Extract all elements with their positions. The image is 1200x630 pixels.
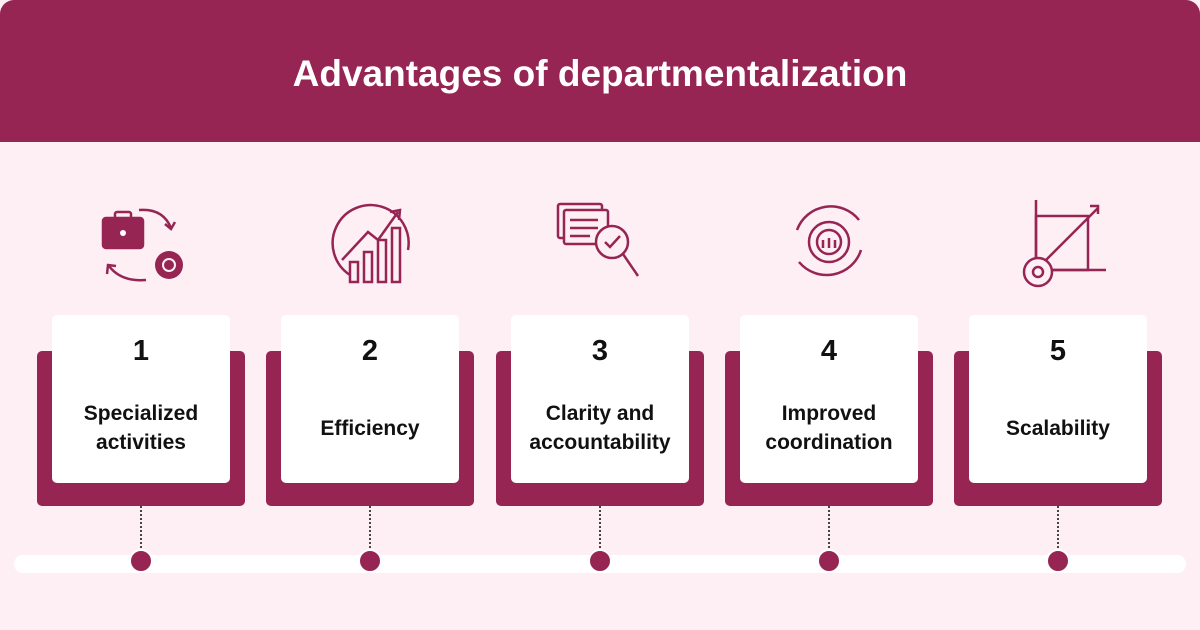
card 1: activities: [96, 431, 186, 454]
icon: gear with rising bars: [331, 204, 410, 284]
dot 3: [588, 549, 612, 573]
title: [0, 0, 1200, 142]
icon: briefcase and gear cycle: [102, 208, 183, 282]
card 5: [969, 315, 1147, 483]
item 1: [37, 208, 245, 571]
icon: gear with cycle arrows: [796, 205, 862, 276]
card 3: [511, 315, 689, 483]
card 4: [740, 315, 918, 483]
title: Advantages of departmentalization: [293, 53, 907, 94]
card 1: [52, 315, 230, 483]
dot 2: [358, 549, 382, 573]
dot 4: [817, 549, 841, 573]
card 4: coordination: [765, 431, 893, 454]
timeline bar: [14, 555, 1186, 573]
card 3: Clarity and: [546, 402, 654, 425]
item 3: [496, 202, 704, 571]
card 4: Improved: [782, 402, 876, 425]
dot 5: [1046, 549, 1070, 573]
card 2: 2: [362, 335, 378, 367]
card 5: Scalability: [1006, 416, 1110, 440]
card 2: Efficiency: [320, 416, 420, 440]
card 2: [281, 315, 459, 483]
icon: scaling axes with gear: [1022, 200, 1106, 288]
card 3: 3: [592, 335, 608, 367]
dot 1: [129, 549, 153, 573]
item 2: [266, 204, 474, 571]
card 5: 5: [1050, 335, 1066, 367]
item 5: [954, 200, 1162, 571]
card 4: 4: [821, 335, 837, 367]
card 3: accountability: [529, 431, 671, 454]
card 1: 1: [133, 335, 149, 367]
icon: chat bubbles and magnifier check: [556, 202, 639, 277]
card 1: Specialized: [84, 402, 198, 425]
item 4: [725, 205, 933, 571]
